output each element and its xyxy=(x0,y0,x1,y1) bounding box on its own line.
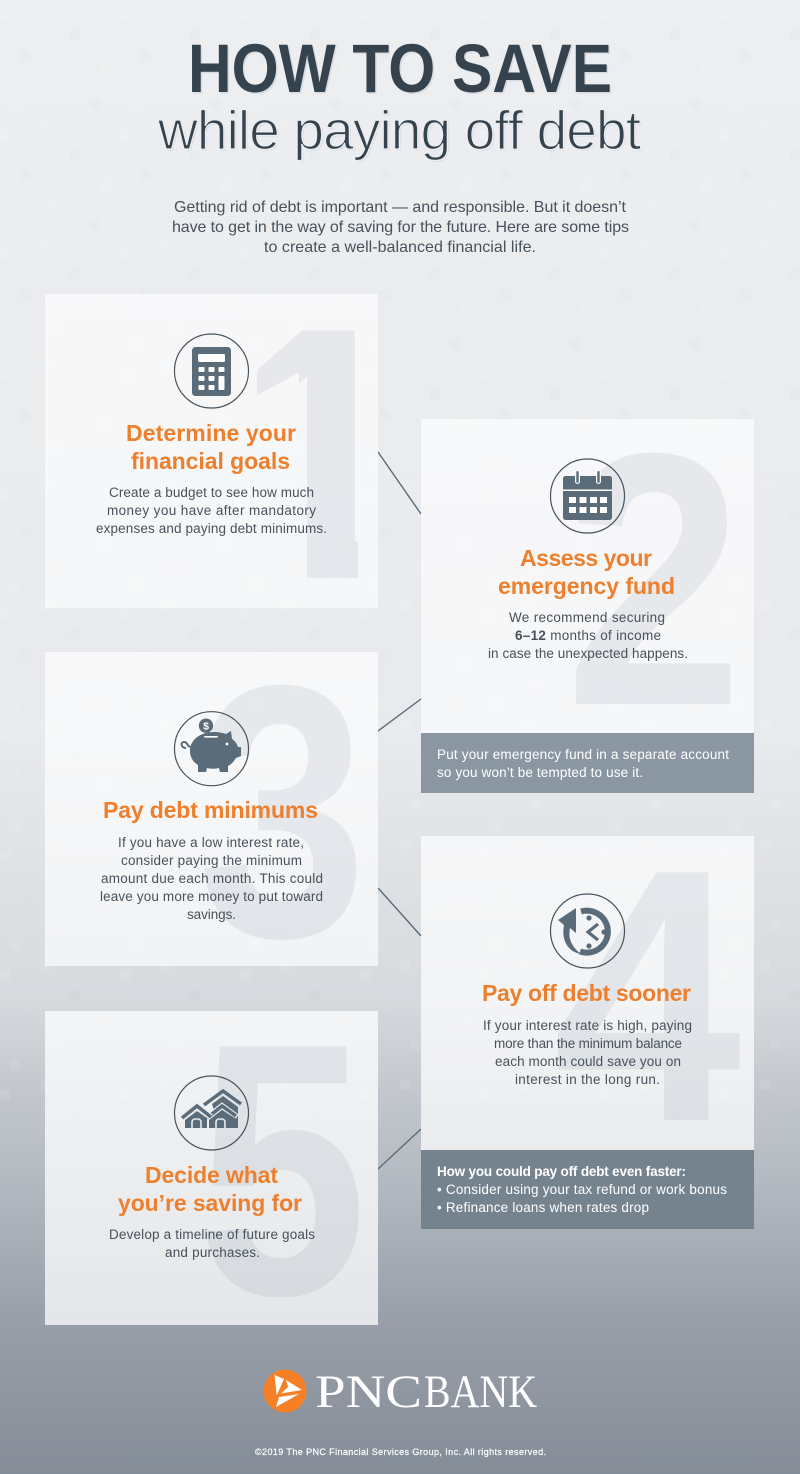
title: HOW TO SAVE xyxy=(188,30,612,107)
body text xyxy=(96,485,327,536)
intro text: have to get in the way of saving for the future. Here are some tips xyxy=(172,219,629,236)
panel: step 2 xyxy=(421,380,754,781)
icon: calculator xyxy=(174,334,248,408)
copyright: ©2019 The PNC Financial Services Group, Inc. All rights reserved. xyxy=(255,1447,546,1457)
body text: and purchases. xyxy=(165,1245,260,1260)
body text: expenses and paying debt minimums. xyxy=(96,521,327,536)
intro text: Getting rid of debt is important — and responsible. But it doesn’t xyxy=(174,199,627,216)
heading: financial goals xyxy=(131,448,290,474)
numeral 4: 4 xyxy=(553,795,743,1197)
body text: Create a budget to see how much xyxy=(109,485,314,500)
numeral 1: 1 xyxy=(204,253,430,655)
heading: Determine your xyxy=(126,420,296,446)
icon: clock with arrow xyxy=(550,894,624,968)
body text xyxy=(488,610,688,661)
panel: step 3 xyxy=(45,611,378,1013)
body text: each month could save you on xyxy=(495,1054,681,1069)
icon: houses xyxy=(174,1076,248,1150)
body text: We recommend securing xyxy=(509,610,665,625)
heading: Assess your xyxy=(520,545,652,571)
title: while paying off debt xyxy=(158,100,642,162)
panel: step 4 xyxy=(421,795,754,1197)
callout: emergency fund tip: so you won’t be tempted to use it. xyxy=(437,765,643,780)
icon: piggy bank xyxy=(174,712,248,786)
body text: savings. xyxy=(187,907,236,922)
intro text xyxy=(172,199,629,256)
heading xyxy=(126,420,296,474)
title xyxy=(157,30,642,162)
heading xyxy=(498,545,675,599)
body text: amount due each month. This could xyxy=(101,871,323,886)
body text: interest in the long run. xyxy=(515,1072,660,1087)
numeral 5: 5 xyxy=(197,969,367,1371)
heading: emergency fund xyxy=(498,573,675,599)
body text xyxy=(109,1227,315,1260)
body text xyxy=(483,1018,692,1087)
heading: Pay debt minimums xyxy=(103,797,318,823)
callout: pay off debt faster: How you could pay off debt even faster: xyxy=(437,1164,686,1179)
body text: 6–12 months of income xyxy=(515,628,661,643)
logo: PNC Bank xyxy=(264,1366,537,1418)
heading: you’re saving for xyxy=(118,1190,302,1216)
body text: consider paying the minimum xyxy=(121,853,302,868)
connector lines xyxy=(378,452,421,1169)
body text: in case the unexpected happens. xyxy=(488,646,688,661)
body text xyxy=(100,835,323,922)
intro text: to create a well-balanced financial life. xyxy=(264,239,536,256)
icon: piggy bank: $ xyxy=(203,720,209,732)
body text: If your interest rate is high, paying xyxy=(483,1018,692,1033)
body text: Develop a timeline of future goals xyxy=(109,1227,315,1242)
logo: PNC Bank: PNC xyxy=(315,1366,422,1418)
callout: pay off debt faster xyxy=(421,1150,754,1229)
callout: pay off debt faster: • Refinance loans when rates drop xyxy=(437,1200,649,1215)
numeral 3: 3 xyxy=(197,611,367,1013)
heading xyxy=(118,1162,302,1216)
numeral 2: 2 xyxy=(565,380,743,781)
body text: leave you more money to put toward xyxy=(100,889,323,904)
panel: step 5 xyxy=(45,969,378,1371)
callout: emergency fund tip: Put your emergency fund in a separate account xyxy=(437,747,729,762)
title: HOW TO SAVE xyxy=(190,32,614,108)
callout: pay off debt faster: • Consider using your tax refund or work bonus xyxy=(437,1182,727,1197)
body text: more than the minimum balance xyxy=(494,1036,682,1051)
body text: money you have after mandatory xyxy=(107,503,316,518)
panel: step 1 xyxy=(45,294,378,608)
callout: emergency fund tip xyxy=(421,733,754,793)
heading: Decide what xyxy=(145,1162,278,1188)
body text: If you have a low interest rate, xyxy=(118,835,304,850)
logo: PNC Bank: BANK xyxy=(424,1366,537,1418)
heading: Pay off debt sooner xyxy=(482,980,691,1006)
icon: calendar xyxy=(550,459,624,533)
title: while paying off debt xyxy=(157,99,641,161)
